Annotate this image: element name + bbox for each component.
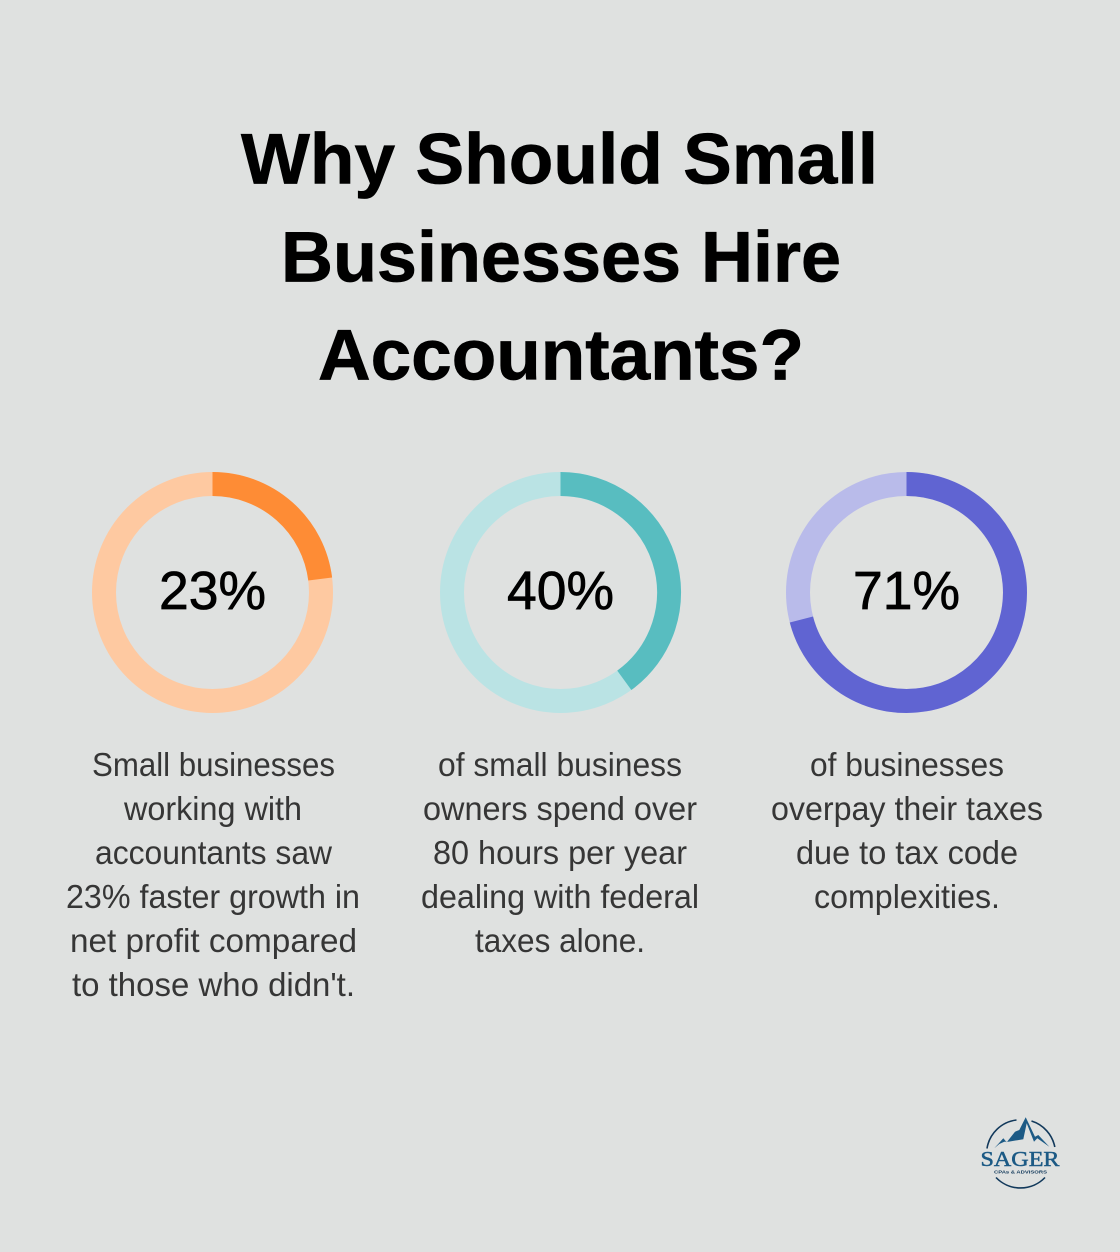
donut chart: 40% xyxy=(452,484,669,701)
value: 23%: 23% xyxy=(159,561,266,621)
description: 23%: 23% faster growth in xyxy=(66,878,360,915)
value: 40%: 40% xyxy=(507,561,614,621)
description: 23%: to those who didn't. xyxy=(72,966,355,1003)
description: 23%: accountants saw xyxy=(95,834,332,871)
description: 40%: of small business xyxy=(438,746,682,783)
description: 40%: dealing with federal xyxy=(421,878,699,915)
description: 71%: due to tax code xyxy=(796,834,1018,871)
description: 23%: net profit compared xyxy=(70,922,357,959)
title xyxy=(241,120,878,396)
donut chart: 71% xyxy=(798,484,1015,701)
description: 40% xyxy=(421,746,699,959)
description: 40%: owners spend over xyxy=(423,790,697,827)
description: 40%: 80 hours per year xyxy=(433,834,687,871)
icon: mountain xyxy=(994,1117,1049,1148)
title: Businesses Hire xyxy=(281,218,841,298)
logo wordmark: SAGER xyxy=(980,1147,1060,1171)
title: Accountants? xyxy=(318,316,804,396)
logo ring arcs xyxy=(987,1120,1055,1188)
description: 23%: working with xyxy=(123,790,302,827)
value: 71%: 71% xyxy=(853,561,960,621)
description: 71%: overpay their taxes xyxy=(771,790,1043,827)
panel: 71% statistic xyxy=(771,484,1043,915)
description: 40%: taxes alone. xyxy=(475,922,645,959)
panel: 40% statistic xyxy=(421,484,699,959)
description: 71%: of businesses xyxy=(810,746,1004,783)
description: 23%: Small businesses xyxy=(92,746,335,783)
donut chart: 23% xyxy=(104,484,321,701)
logo tagline: CPAs & ADVISORS xyxy=(994,1169,1047,1174)
description: 71%: complexities. xyxy=(814,878,1000,915)
description: 71% xyxy=(771,746,1043,915)
panel: 23% statistic xyxy=(66,484,360,1003)
title: Why Should Small xyxy=(241,120,878,200)
logo: Sager CPAs & Advisors xyxy=(980,1117,1060,1188)
description: 23% xyxy=(66,746,360,1003)
